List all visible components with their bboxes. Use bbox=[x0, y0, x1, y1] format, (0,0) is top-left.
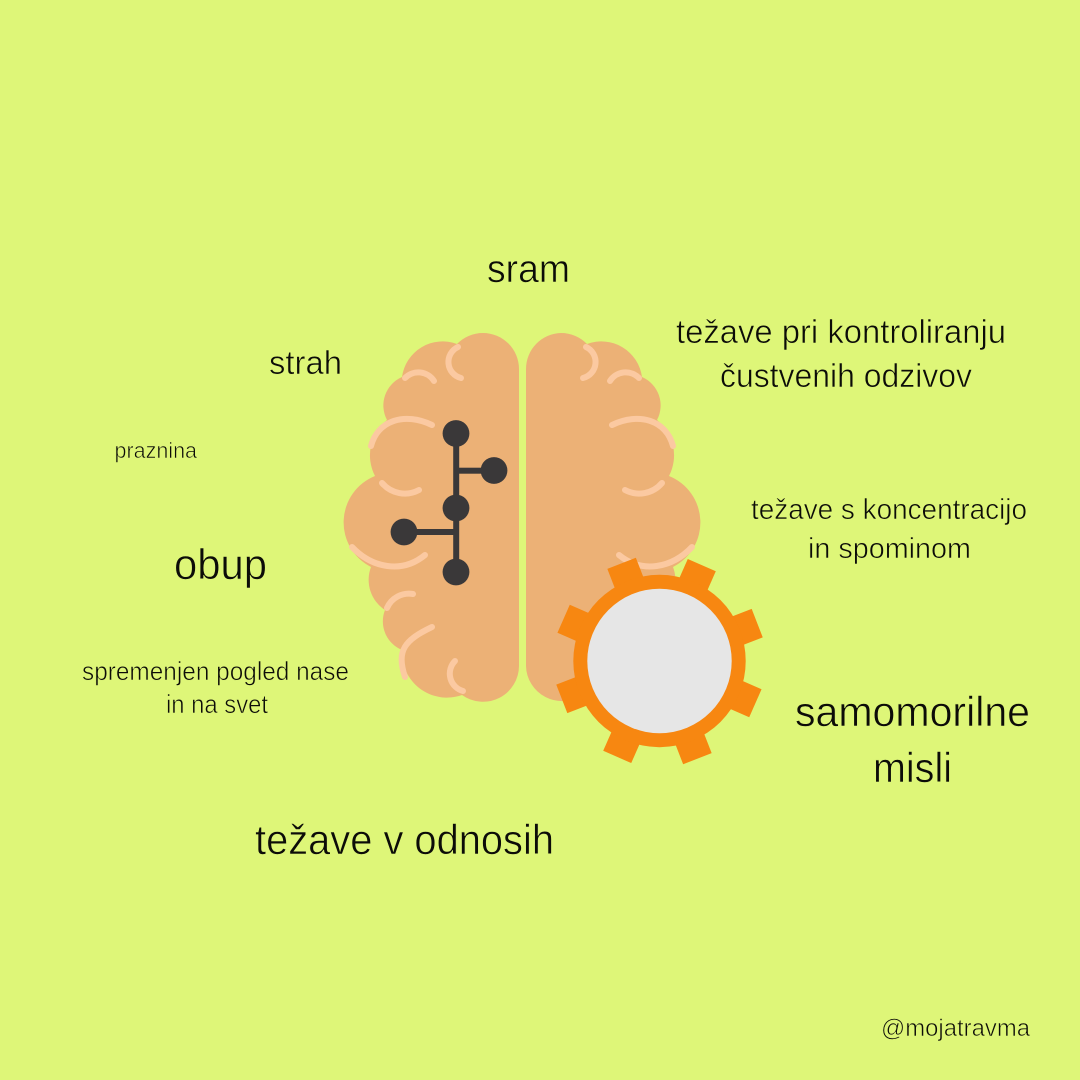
label: sram: sram bbox=[487, 248, 570, 291]
label: težave pri kontroliranju čustvenih odzivov: čustvenih odzivov bbox=[720, 357, 972, 394]
label: težave s koncentracijo in spominom bbox=[751, 494, 1027, 565]
label: samomorilne misli: misli bbox=[873, 744, 952, 791]
brain: right hemisphere bbox=[526, 333, 700, 701]
label: spremenjen pogled nase in na svet: in na svet bbox=[166, 689, 269, 719]
label: težave s koncentracijo in spominom: težave s koncentracijo bbox=[751, 494, 1027, 526]
label: samomorilne misli: samomorilne bbox=[795, 688, 1030, 735]
label: samomorilne misli bbox=[795, 688, 1030, 791]
label: spremenjen pogled nase in na svet bbox=[82, 656, 349, 719]
label: težave pri kontroliranju čustvenih odzivov bbox=[676, 313, 1006, 394]
illustration: brain bbox=[344, 333, 700, 702]
icon: neural tree network bbox=[391, 420, 507, 585]
handle: @mojatravma: @mojatravma bbox=[881, 1015, 1031, 1042]
label: strah: strah bbox=[269, 344, 342, 381]
icon: orange gear bbox=[556, 558, 763, 764]
label: težave s koncentracijo in spominom: in spominom bbox=[808, 533, 971, 565]
label: praznina: praznina bbox=[114, 438, 197, 463]
label: težave v odnosih: težave v odnosih bbox=[255, 816, 554, 863]
label: težave pri kontroliranju čustvenih odzivov: težave pri kontroliranju bbox=[676, 313, 1006, 350]
label: obup: obup bbox=[174, 541, 267, 589]
label: spremenjen pogled nase in na svet: spremenjen pogled nase bbox=[82, 656, 349, 686]
brain: left hemisphere bbox=[344, 333, 519, 702]
